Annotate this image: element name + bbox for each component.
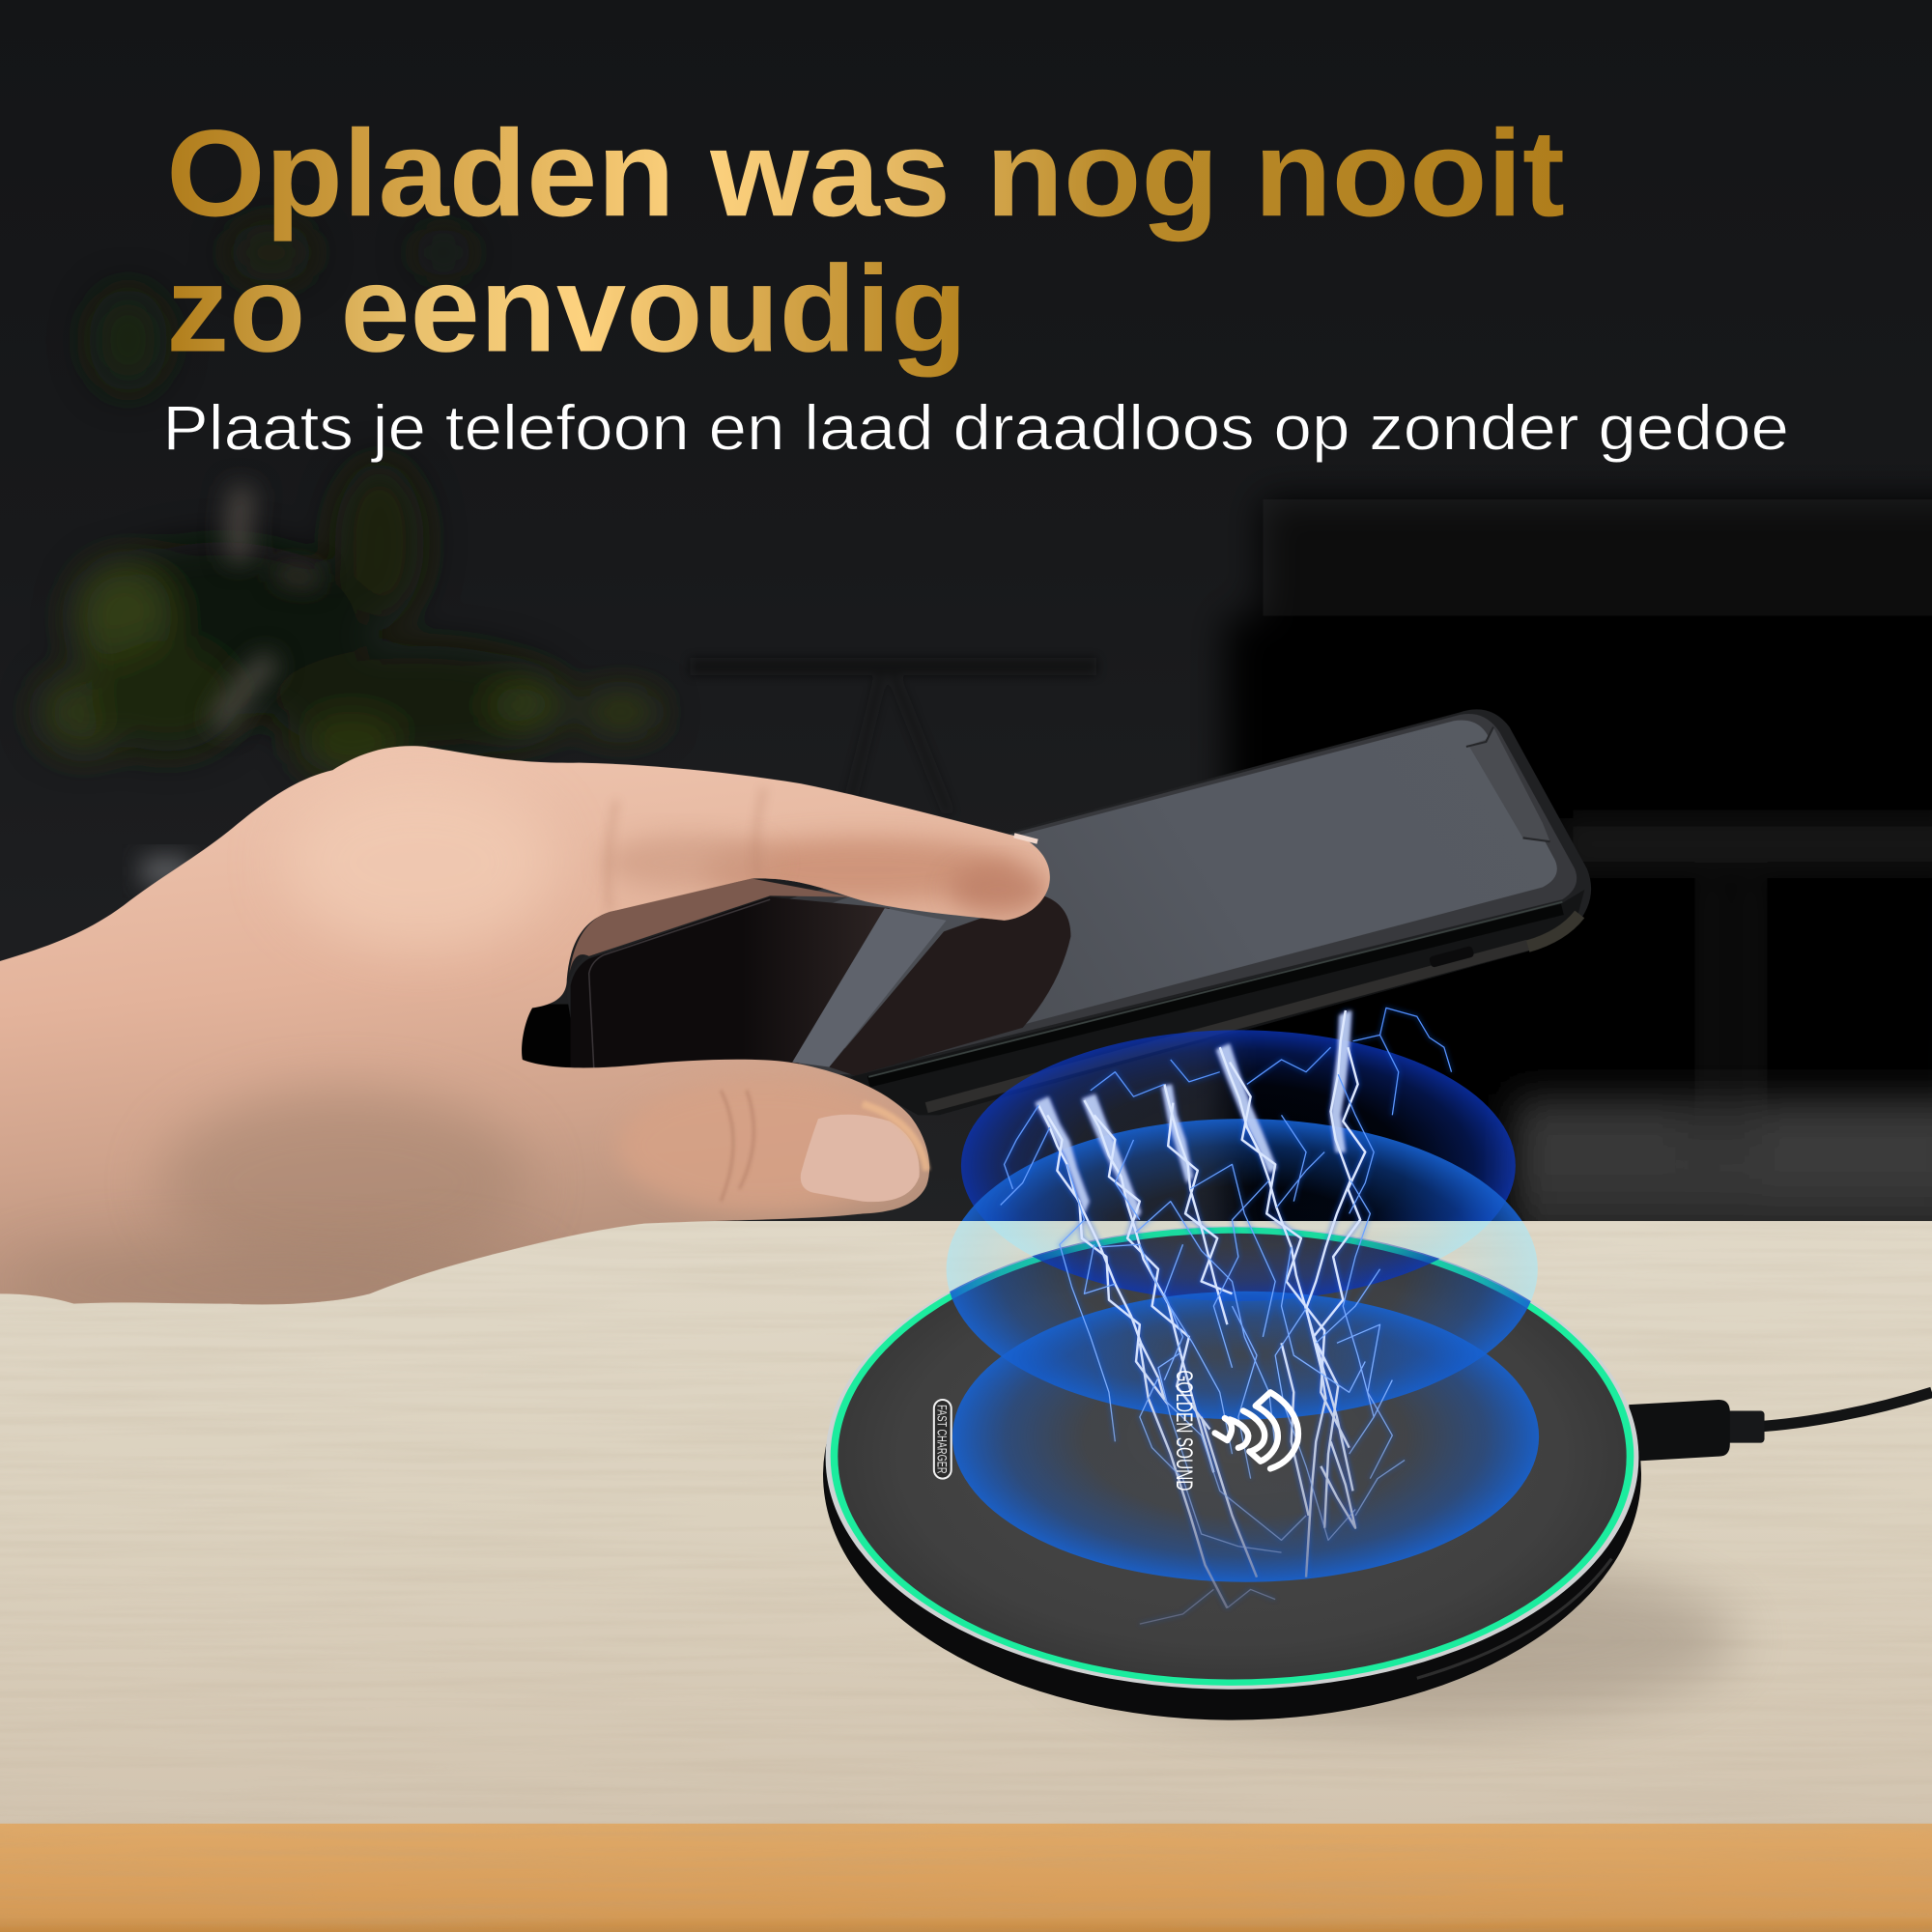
pale background object: [142, 856, 191, 886]
hand shading: [0, 777, 1047, 1323]
thin branches: [1001, 1008, 1452, 1624]
bolt trunks: [1035, 1010, 1351, 1220]
lightning bolts: [1001, 1008, 1452, 1624]
fingernail tip: [1014, 836, 1037, 841]
fast charger badge: [934, 1400, 952, 1479]
subtitle: Plaats je telefoon en laad draadloos op zonder gedoe: [162, 393, 1789, 465]
sofa silhouette: [1226, 499, 1932, 1257]
icon: wireless logo: [1215, 1392, 1298, 1468]
phone body: [567, 709, 1591, 1115]
green LED ring: [831, 1227, 1634, 1686]
thumbnail: [801, 1115, 920, 1202]
black gap behind hand: [518, 1005, 591, 1078]
shadowed flesh under finger: [569, 878, 850, 974]
bench and legs: [1565, 818, 1932, 1189]
inner glass line: [589, 899, 770, 1069]
table front edge: [0, 1824, 1932, 1932]
silver rim: [826, 1226, 1638, 1690]
wireless charger pad: [823, 1226, 1641, 1720]
pad surface: [838, 1234, 1627, 1680]
plant blur: [40, 223, 661, 775]
phone: [518, 709, 1591, 1115]
side table blur: [690, 658, 1096, 813]
plant trunk: [219, 487, 318, 727]
table top: [0, 1221, 1932, 1828]
main strands: [1038, 1010, 1365, 1608]
background room: [0, 0, 1932, 1257]
title: Opladen was nog nooit: [166, 105, 1565, 242]
finger reflection: [829, 895, 1070, 1076]
title: [166, 105, 1565, 379]
pad shadow: [1047, 1552, 1737, 1725]
USB cable: [1629, 1392, 1932, 1462]
gray reflection streak: [792, 908, 947, 1067]
floor: [1513, 1094, 1932, 1254]
brand text: GOLDEN SOUND: [1171, 1370, 1197, 1491]
notch outline: [1466, 727, 1550, 841]
screen: [589, 714, 1577, 1074]
dark left reflection: [571, 897, 890, 1069]
pad body: [823, 1230, 1641, 1720]
title: zo eenvoudig: [166, 242, 967, 379]
fast charger badge: FAST CHARGER: [935, 1405, 950, 1474]
phone bottom edge: [850, 890, 1584, 1115]
notch area: [1468, 727, 1550, 841]
energy rings: [947, 1030, 1539, 1582]
pale energy rings over table: [947, 1221, 1538, 1300]
hand: [0, 746, 1050, 1323]
